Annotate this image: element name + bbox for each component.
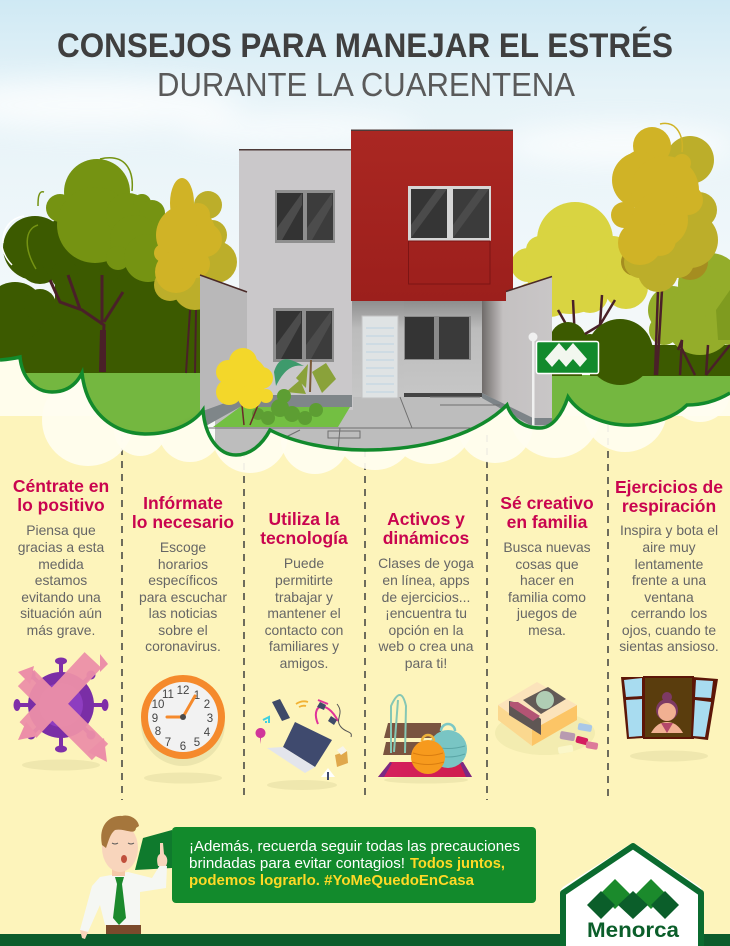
column 6: breathing: ventana [644,589,694,605]
icon: clock: 1 [194,690,200,702]
column 2: stay informed: Infórmate [143,493,223,513]
illustrated scene: sky, trees and house [0,0,730,465]
speech bubble: podemos lograrlo. #YoMeQuedoEnCasa [189,872,475,889]
sky [0,0,730,460]
icon: clock: 11 [162,689,174,701]
door [362,316,398,398]
column 2: stay informed: lo necesario [132,512,234,532]
column 6: breathing: lentamente [635,556,704,572]
red block window [408,186,491,241]
clouds under the scene [0,350,730,474]
column 3: technology: contacto con [265,622,343,638]
ground right [552,375,730,424]
column 3: technology: trabajar y [275,589,333,605]
right side wall [482,277,552,418]
icon: clock: 7 [165,737,171,749]
column 3: technology: mantener el [267,605,341,621]
map pin [255,728,266,744]
column 2: stay informed: coronavirus. [145,638,221,654]
ground floor window [404,316,471,360]
floor [215,396,545,454]
right shutter [691,677,718,740]
column 1: positive focus: más grave. [27,622,95,638]
column 5: family creativity: en familia [507,512,588,532]
bench [384,723,441,738]
column 4: active: Activos y [387,509,465,529]
column 5: family creativity: hacer en [520,572,574,588]
column dividers [122,425,608,800]
column 3: technology: amigos. [280,655,328,671]
column 6: breathing: cerrando los [631,605,707,621]
sign with logo [536,342,598,374]
column 1: positive focus [13,476,109,638]
upload arrow [321,768,335,777]
column 3: technology: tecnología [260,528,348,548]
column 3: technology: Utiliza la [268,509,340,529]
shirt [80,865,167,932]
column 4: active: web o crea una [378,638,474,654]
column 2: stay informed: las noticias [149,605,217,621]
Menorca logo badge [560,844,703,946]
column 3: technology: Puede [284,555,324,571]
darker branches [50,275,123,372]
icon: yoga and exercise gear [378,695,472,784]
icon: crossed-out virus [14,654,108,770]
icon: clock: 5 [194,737,200,749]
left side wall [200,275,247,412]
icon: clock: 4 [204,727,211,739]
column 6: breathing: frente a una [632,572,706,588]
phone [272,699,290,721]
ground left [26,373,200,432]
red block [351,130,513,301]
music notes [263,717,269,723]
column 4: active [378,509,474,671]
column 5: family creativity [500,493,594,638]
column 1: positive focus: evitando una [21,589,101,605]
column 6: breathing: ojos, cuando te [622,622,716,638]
hair [101,815,139,848]
column 1: positive focus: gracias a esta [18,539,105,555]
jump rope [391,695,406,753]
speech bubble: brindadas para evitar contagios! [189,855,405,872]
bottom band [0,934,730,946]
column 5: family creativity: juegos de [516,605,577,621]
column 1: positive focus: Céntrate en [13,476,109,496]
garden plants [216,348,336,425]
character with megaphone [80,815,172,939]
column 6: breathing: aire muy [642,539,696,555]
mat [378,762,472,777]
scalloped green border [0,357,730,455]
upper left window [275,190,335,243]
column 1: positive focus: Piensa que [26,522,96,538]
woman [651,692,683,733]
tree group: right [511,123,730,385]
speech bubble [172,827,536,903]
icon: clock: 12 [177,685,189,697]
lawn [213,407,350,427]
column 2: stay informed: para escuchar [139,589,227,605]
icon: clock: 9 [152,713,158,725]
column 4: active: de ejercicios... [382,589,470,605]
left shutter [621,677,644,739]
icon: clock: 6 [180,741,186,753]
left white block [239,150,353,410]
column 4: active: opción en la [389,622,464,638]
title: CONSEJOS PARA MANEJAR EL ESTRÉS [57,25,673,65]
column 3: technology [260,509,348,671]
lower left window [273,308,334,362]
wifi [296,701,308,707]
column 4: active: para ti! [405,655,447,671]
column 3: technology: familiares y [269,638,339,654]
column 2: stay informed: sobre el [158,622,208,638]
speech bubble: ¡Además, recuerda seguir todas las precauciones [189,838,520,855]
column 6: breathing: Inspira y bota el [620,522,718,538]
column 6: breathing [615,477,723,654]
column 2: stay informed: Escoge [160,539,206,555]
icon: technology gadgets [255,699,351,790]
column 4: active: ¡encuentra tu [385,605,467,621]
column 2: stay informed: horarios [158,556,208,572]
column 1: positive focus: medida [38,556,84,572]
column 6: breathing: Ejercicios de [615,477,723,497]
icon: puzzle box [495,682,598,755]
title: DURANTE LA CUARENTENA [157,66,575,103]
face [112,843,134,844]
column 1: positive focus: lo positivo [17,495,105,515]
lamp post [528,332,538,430]
neck and head [112,865,125,876]
folder [335,751,348,767]
column 4: active: en línea, apps [382,572,470,588]
house [200,130,552,465]
icon: clock: 3 [207,713,213,725]
paving [207,397,500,450]
orange ball [411,735,445,774]
icon: clock [141,675,225,784]
column 5: family creativity: cosas que [515,556,579,572]
laptop [283,722,332,767]
title [57,25,673,103]
column 2: stay informed [132,493,234,654]
tree group: left [0,158,237,373]
column 5: family creativity: Busca nuevas [503,539,591,555]
speech bubble: Todos juntos, [410,855,505,872]
ground floor recess [352,300,487,397]
icon: clock: 2 [204,699,210,711]
icon: person at window [621,677,718,762]
column 5: family creativity: familia como [508,589,586,605]
yellow tree [186,310,196,373]
column 3: technology: permitirte [275,572,333,588]
icon: clock: 8 [155,726,161,738]
column 4: active: dinámicos [383,528,470,548]
brand name: Menorca [587,919,679,942]
sky clouds [0,81,730,165]
column 5: family creativity: mesa. [528,622,566,638]
belt and trousers [106,925,141,934]
megaphone [135,830,172,870]
column 1: positive focus: estamos [35,572,87,588]
raised hand [157,843,167,866]
column 5: family creativity: Sé creativo [500,493,594,513]
teal ball [429,724,467,768]
column 1: positive focus: situación aún [20,605,102,621]
headphones [316,700,338,724]
column 2: stay informed: específicos [148,572,218,588]
column 6: breathing: sientas ansioso. [619,638,719,654]
red panel [408,241,490,284]
icon: clock: 10 [152,699,164,711]
column 6: breathing: respiración [622,496,716,516]
column 4: active: Clases de yoga [378,555,474,571]
puzzle pieces [558,723,598,754]
tie [113,877,126,925]
